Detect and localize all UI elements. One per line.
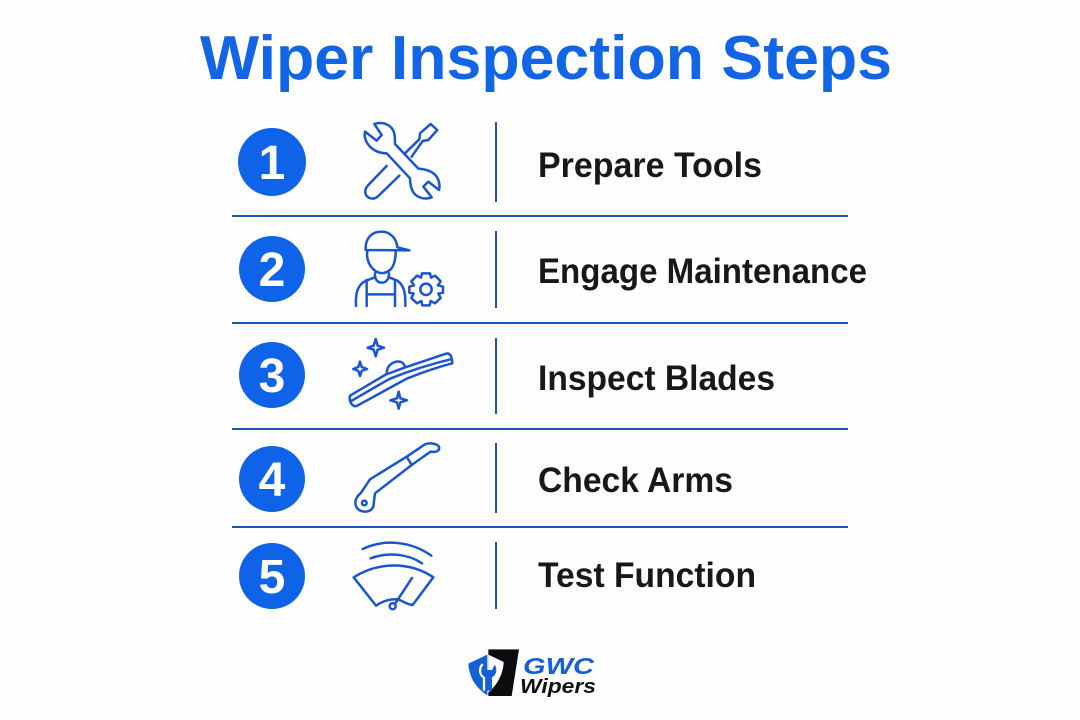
icon: mechanic with gear	[356, 232, 443, 306]
icon: wiper blade with sparkles	[350, 339, 452, 409]
number badge 5: 5	[259, 551, 285, 604]
step 4: Check Arms	[239, 443, 733, 512]
logo: GWC Wipers	[468, 649, 596, 698]
number badge 2: 2	[259, 244, 285, 297]
title: Wiper Inspection Steps	[200, 24, 892, 93]
number badge 1: 1	[259, 137, 285, 190]
number badge 3	[239, 342, 305, 408]
step 1: Prepare Tools	[238, 123, 762, 199]
label: Test Function	[538, 556, 756, 595]
number badge 3: 3	[259, 350, 285, 403]
logo shield icon	[468, 649, 519, 696]
number badge 4	[239, 446, 305, 512]
icon: wrench and screwdriver	[365, 123, 439, 199]
label: Check Arms	[538, 461, 733, 500]
icon: wiper arm	[355, 443, 439, 512]
icon: windshield sweep	[354, 543, 433, 609]
step 3: Inspect Blades	[239, 339, 775, 409]
number badge 1	[238, 128, 306, 196]
label: Prepare Tools	[538, 146, 762, 185]
number badge 5	[239, 543, 305, 609]
number badge 2	[239, 236, 305, 302]
step 5: Test Function	[239, 543, 756, 609]
step 2: Engage Maintenance	[239, 232, 867, 306]
label: Inspect Blades	[538, 359, 775, 398]
logo text Wipers: Wipers	[520, 676, 596, 698]
label: Engage Maintenance	[538, 252, 867, 291]
logo text GWC: GWC	[523, 653, 594, 679]
number badge 4: 4	[259, 454, 286, 507]
